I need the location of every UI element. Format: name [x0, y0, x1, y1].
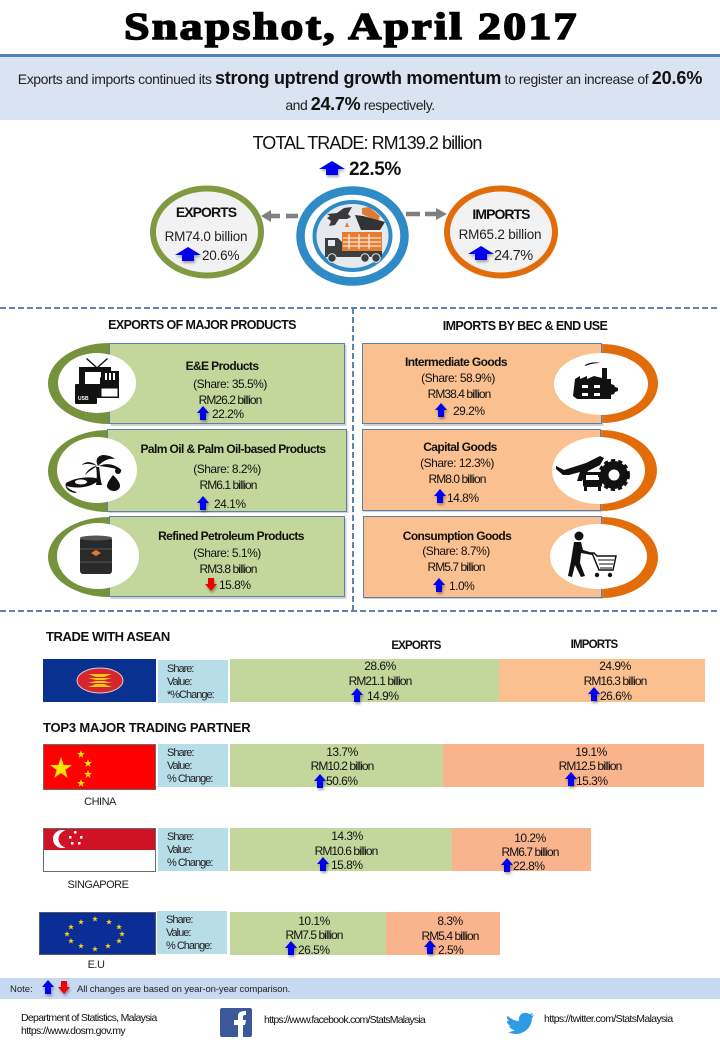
intro band: and 24.7% respectively. [285, 94, 435, 114]
row: ASEAN [43, 659, 705, 703]
row: China: 19.1% [575, 745, 608, 759]
row: China: % Change: [167, 773, 213, 785]
row: ASEAN: RM21.1 billion [349, 674, 412, 688]
row: Singapore: 15.8% [331, 858, 363, 872]
icon: oil barrel [80, 536, 112, 574]
header rule [0, 54, 720, 57]
panel: exports of major products [48, 318, 348, 599]
intro band [0, 57, 720, 120]
column heading: imports: IMPORTS [571, 639, 619, 651]
card: palm oil products [48, 430, 348, 513]
card: refined petroleum products: 15.8% [219, 578, 251, 592]
note band [0, 978, 720, 999]
card: capital goods: Capital Goods [423, 440, 498, 454]
card: refined petroleum products: (Share: 5.1%) [193, 546, 261, 560]
row: E.U: 8.3% [437, 914, 464, 928]
icon: EU flag [40, 912, 156, 954]
heading: exports of major products: EXPORTS OF MAJOR PRODUCTS [108, 318, 296, 332]
icon: Singapore flag [44, 828, 156, 872]
icon: electronics: USB [78, 396, 89, 402]
row: E.U: E.U [88, 959, 105, 971]
card: E&E products [48, 343, 346, 426]
row: E.U: 10.1% [298, 914, 331, 928]
total trade value: TOTAL TRADE: RM139.2 billion [253, 133, 481, 153]
title: Snapshot, April 2017 [124, 6, 579, 48]
row: E.U: % Change: [166, 940, 212, 952]
card: intermediate goods: (Share: 58.9%) [421, 371, 495, 385]
intro band: Exports and imports continued its strong uptrend growth momentum to register an increase of 20.6% [18, 68, 702, 88]
facebook url: https://www.facebook.com/StatsMalaysia [264, 1014, 426, 1026]
note band: All changes are based on year-on-year comparison. [77, 984, 290, 995]
card: capital goods: 14.8% [447, 491, 479, 505]
row: Singapore: 10.2% [514, 831, 547, 845]
card: capital goods: (Share: 12.3%) [420, 456, 494, 470]
row: Singapore: RM10.6 billion [315, 844, 378, 858]
heading: top 3 major trading partner: TOP3 MAJOR TRADING PARTNER [43, 720, 251, 735]
arrow: to exports [261, 210, 298, 222]
card: refined petroleum products: RM3.8 billion [199, 562, 257, 576]
note band: Note: [10, 984, 33, 995]
card: refined petroleum products: Refined Petroleum Products [158, 529, 305, 543]
row: E.U: Value: [166, 927, 191, 939]
card: consumption goods [364, 516, 658, 599]
card: E&E products: E&E Products [186, 359, 259, 373]
card: palm oil products: (Share: 8.2%) [193, 462, 261, 476]
row: E.U: RM5.4 billion [421, 929, 479, 943]
row: Singapore: SINGAPORE [68, 879, 129, 891]
icon: ASEAN flag [43, 659, 156, 702]
panel: imports by BEC and end use [362, 319, 658, 599]
row: E.U: Share: [166, 914, 193, 926]
arrow: to imports [406, 208, 447, 220]
row: ASEAN: 14.9% [367, 689, 399, 703]
row: Singapore: % Change: [167, 857, 213, 869]
row: China: Value: [167, 760, 192, 772]
imports circle: IMPORTS [472, 206, 530, 222]
row: Singapore: RM6.7 billion [501, 845, 559, 859]
row: E.U: 2.5% [438, 943, 464, 957]
total trade change [319, 159, 401, 180]
card: intermediate goods: 29.2% [453, 404, 485, 418]
row: Singapore: 14.3% [331, 829, 364, 843]
twitter url: https://twitter.com/StatsMalaysia [544, 1013, 673, 1025]
row: Singapore: Share: [167, 831, 194, 843]
imports circle: RM65.2 billion [459, 227, 541, 242]
footer: organisation: Department of Statistics, Malaysia [21, 1012, 157, 1024]
row: ASEAN: *%Change: [167, 689, 215, 701]
card: E&E products: 22.2% [212, 407, 244, 421]
exports circle: 20.6% [202, 248, 239, 263]
card: palm oil products: 24.1% [214, 497, 246, 511]
row: China: 13.7% [326, 745, 359, 759]
card: capital goods: RM8.0 billion [428, 472, 486, 486]
card: palm oil products: Palm Oil & Palm Oil-based Products [140, 442, 326, 456]
exports circle [153, 188, 261, 276]
card: capital goods [362, 430, 657, 512]
exports circle: RM74.0 billion [165, 229, 247, 244]
exports circle: EXPORTS [176, 204, 237, 220]
card: intermediate goods [362, 344, 658, 426]
row: China: RM12.5 billion [559, 759, 622, 773]
icon: palm tree and oil drops [66, 455, 122, 493]
row: E.U [40, 911, 500, 971]
card: refined petroleum products [48, 516, 346, 599]
column heading: exports: EXPORTS [391, 640, 442, 652]
icon: twitter [507, 1013, 534, 1034]
icon: plane, bus and gear [556, 456, 628, 491]
icon: factory [573, 362, 618, 399]
card: E&E products: RM26.2 billion [199, 393, 262, 407]
row: China: Share: [167, 747, 194, 759]
heading: imports by BEC: IMPORTS BY BEC & END USE [443, 319, 608, 333]
row: China: RM10.2 billion [311, 759, 374, 773]
imports circle: 24.7% [494, 248, 533, 264]
row: ASEAN: RM16.3 billion [584, 674, 647, 688]
row: E.U: 26.5% [298, 943, 330, 957]
imports circle [447, 188, 555, 276]
row: ASEAN: Value: [167, 676, 192, 688]
row: ASEAN: Share: [167, 663, 194, 675]
card: intermediate goods: RM38.4 billion [428, 387, 491, 401]
card: intermediate goods: Intermediate Goods [405, 355, 508, 369]
icon: China flag [44, 744, 156, 790]
total trade change: 22.5% [349, 159, 401, 180]
card: consumption goods: (Share: 8.7%) [422, 544, 490, 558]
row: China: 50.6% [326, 774, 358, 788]
icon: shopper with cart [568, 532, 616, 577]
footer: organisation [21, 1012, 157, 1037]
row: Singapore: Value: [167, 844, 192, 856]
icon: electronics [75, 358, 119, 404]
row: ASEAN: 24.9% [599, 659, 632, 673]
footer: organisation: https://www.dosm.gov.my [21, 1025, 126, 1037]
card: consumption goods: 1.0% [449, 579, 475, 593]
row: China [44, 744, 704, 808]
row: Singapore: 22.8% [513, 859, 545, 873]
row: Singapore [44, 828, 591, 891]
card: palm oil products: RM6.1 billion [199, 478, 257, 492]
card: consumption goods: RM5.7 billion [427, 560, 485, 574]
row: E.U: RM7.5 billion [285, 928, 343, 942]
icon: trade hub with truck, ship and plane [300, 190, 404, 282]
heading: trade with ASEAN: TRADE WITH ASEAN [46, 629, 170, 644]
row: ASEAN: 26.6% [600, 689, 632, 703]
icon: facebook [220, 1008, 252, 1037]
row: China: CHINA [84, 796, 117, 808]
row: ASEAN: 28.6% [364, 659, 397, 673]
row: China: 15.3% [576, 774, 608, 788]
card: E&E products: (Share: 35.5%) [193, 377, 267, 391]
card: consumption goods: Consumption Goods [403, 529, 512, 543]
